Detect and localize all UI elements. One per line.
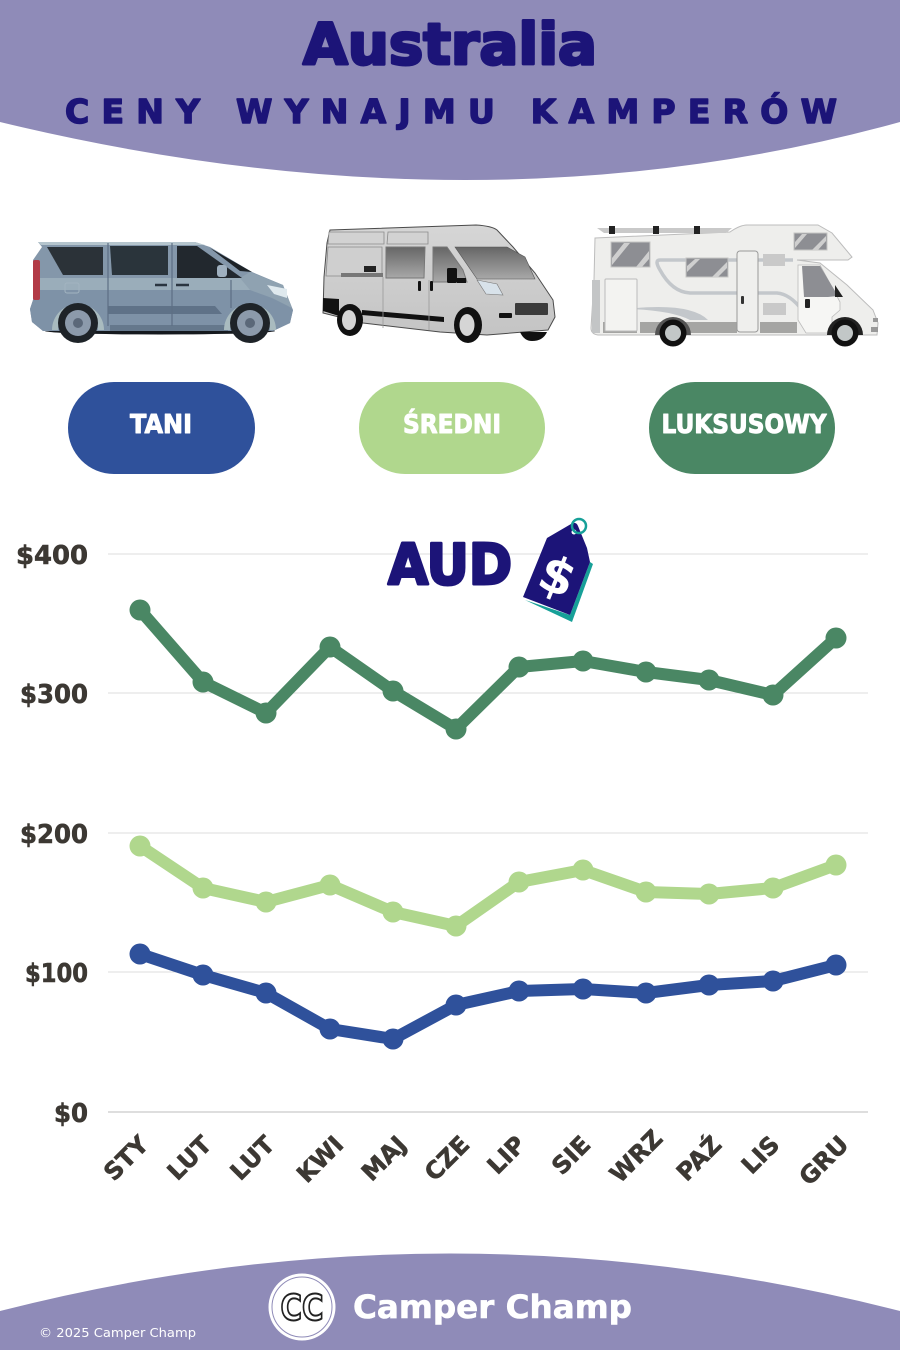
x axis labels: STY — [98, 1130, 155, 1186]
brand name: Camper Champ — [353, 1288, 632, 1326]
logo — [268, 1274, 336, 1340]
line chart — [16, 541, 868, 1191]
pill: mid-range: ŚREDNI — [403, 408, 501, 440]
series: budget — [130, 944, 846, 1050]
vehicle: budget minivan — [30, 242, 293, 343]
vehicle: mid-range van — [323, 225, 555, 343]
icon: price tag: $ — [530, 543, 584, 610]
vehicle: luxury motorhome — [591, 225, 878, 346]
title: Australia — [303, 12, 597, 78]
pill: luxury: LUKSUSOWY — [662, 410, 828, 440]
x axis labels: LUT — [162, 1130, 218, 1186]
y axis labels: $400 — [16, 541, 88, 571]
header banner — [0, 0, 900, 180]
series: luxury — [130, 600, 846, 740]
icon: price tag — [523, 519, 593, 622]
x axis labels: SIE — [546, 1130, 596, 1180]
y axis labels — [16, 541, 88, 1129]
x axis labels: GRU — [794, 1130, 854, 1191]
x axis labels: LIS — [736, 1130, 785, 1180]
van windows — [47, 246, 252, 278]
x axis labels: WRZ — [604, 1124, 668, 1188]
x axis labels: LIP — [482, 1130, 531, 1180]
y axis labels: $300 — [20, 680, 88, 710]
motorhome windows — [611, 233, 827, 277]
y axis labels: $100 — [25, 959, 88, 989]
x axis labels: MAJ — [356, 1130, 412, 1187]
pill: budget: TANI — [130, 410, 192, 440]
pill: budget — [68, 382, 255, 474]
van wheels — [337, 304, 547, 343]
y axis labels: $200 — [20, 820, 88, 850]
series: mid-range — [130, 836, 846, 936]
x axis labels — [98, 1124, 854, 1191]
x axis labels: KWI — [291, 1130, 349, 1188]
copyright: © 2025 Camper Champ — [39, 1325, 196, 1340]
footer banner — [0, 1254, 900, 1350]
logo: CC — [280, 1288, 324, 1329]
motorhome wheels — [655, 317, 863, 346]
subtitle: CENY WYNAJMU KAMPERÓW — [65, 91, 837, 131]
van wheels — [52, 303, 276, 343]
pill: mid-range — [359, 382, 545, 474]
x axis labels: LUT — [225, 1130, 281, 1186]
pill: luxury — [649, 382, 835, 474]
x axis labels: PAŹ — [670, 1130, 727, 1187]
x axis labels: CZE — [419, 1130, 475, 1187]
y axis labels: $0 — [54, 1099, 88, 1129]
currency label: AUD — [388, 533, 512, 598]
